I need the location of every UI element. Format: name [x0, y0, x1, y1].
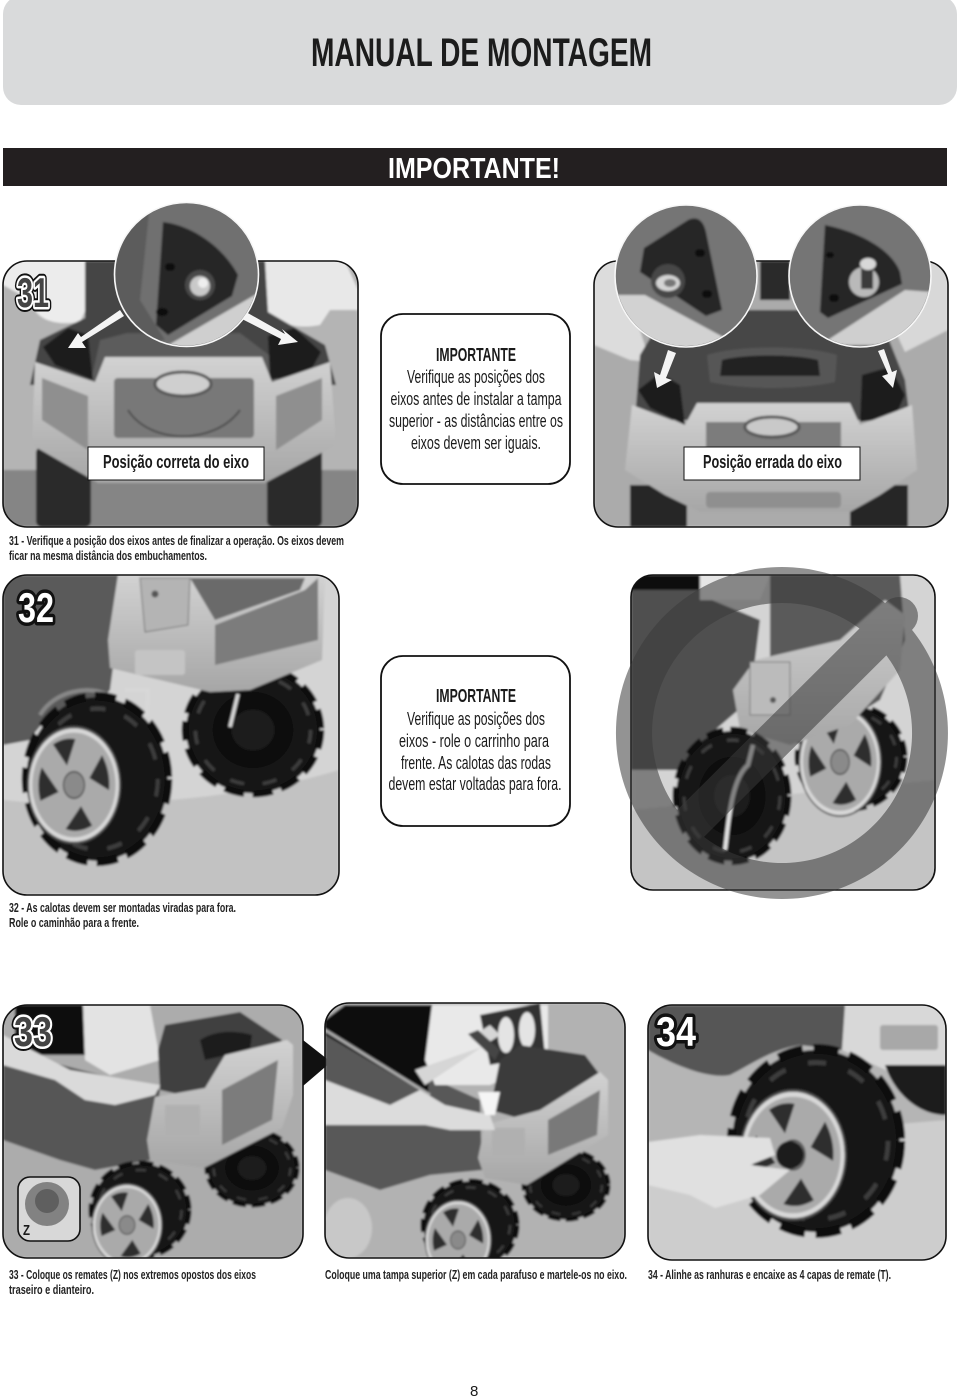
callout: step 31 importante: superior - as distâncias entre os: [389, 411, 563, 431]
label: wrong position: [684, 447, 860, 480]
badge: step 31: 31: [17, 269, 49, 316]
caption: step 32: 32 - As calotas devem ser montadas viradas para fora.: [9, 900, 236, 915]
caption: step 33: traseiro e dianteiro.: [9, 1282, 94, 1297]
callout: step 32 importante: Verifique as posições dos: [407, 709, 545, 729]
caption: step 32: Role o caminhão para a frente.: [9, 915, 139, 930]
magnifier: wrong axle right: [789, 205, 932, 348]
panel: step 32 correct wheels photo: [3, 575, 339, 895]
label: correct position: Posição correta do eixo: [103, 452, 249, 472]
callout: step 32 importante: devem estar voltadas para fora.: [388, 774, 562, 794]
badge: step 33: 33: [14, 1008, 52, 1055]
caption: step 32: [9, 900, 236, 930]
caption: step 33 hammer: Coloque uma tampa superior (Z) em cada parafuso e martele-os no eixo.: [325, 1267, 627, 1282]
panel: step 33 photo one: [3, 1005, 303, 1266]
caption: step 33: 33 - Coloque os remates (Z) nos extremos opostos dos eixos: [9, 1267, 256, 1282]
callout: step 32 importante: [381, 656, 570, 826]
header band: [3, 0, 957, 105]
badge: step 32: 32: [18, 584, 54, 631]
caption: step 33: [9, 1267, 256, 1297]
callout: step 31 importante: IMPORTANTE: [436, 345, 516, 365]
badge: step 33: 33: [14, 1008, 52, 1055]
panel: step 33 photo two: [324, 1003, 625, 1280]
magnifier: wrong axle left: [615, 205, 758, 350]
badge: step 34: 34: [656, 1008, 697, 1055]
callout: step 31 importante: [381, 314, 570, 484]
callout: step 31 importante: eixos antes de instalar a tampa: [390, 389, 562, 409]
panel: step 31 wrong position photo: [594, 261, 948, 527]
inset: part Z: [18, 1177, 80, 1241]
arrow between steps: [303, 1040, 331, 1086]
caption: step 31: [9, 533, 344, 563]
important banner: IMPORTANTE!: [388, 153, 560, 185]
callout: step 32 importante: frente. As calotas das rodas: [401, 753, 551, 773]
inset: part Z: Z: [23, 1222, 30, 1239]
prohibition symbol: [616, 567, 948, 899]
magnifier: correct axle: [114, 202, 260, 347]
badge: step 31: 31: [17, 269, 49, 316]
title: MANUAL DE MONTAGEM: [311, 31, 652, 75]
callout: step 32 importante: eixos - role o carrinho para: [399, 731, 550, 751]
callout: step 32 importante: IMPORTANTE: [436, 686, 516, 706]
important banner: [3, 148, 947, 186]
caption: step 31: 31 - Verifique a posição dos eixos antes de finalizar a operação. Os eixos devem: [9, 533, 344, 548]
arrows: correct position: [68, 310, 298, 348]
caption: step 31: ficar na mesma distância dos embuchamentos.: [9, 548, 207, 563]
panel: step 34 photo: [648, 1005, 946, 1260]
label: wrong position: Posição errada do eixo: [703, 452, 842, 472]
callout: step 31 importante: Verifique as posições dos: [407, 367, 545, 387]
badge: step 31: [17, 269, 49, 316]
arrows: wrong position: [654, 349, 897, 388]
panel: step 31 correct position photo: [3, 261, 358, 527]
callout: step 31 importante: eixos devem ser iguais.: [411, 433, 541, 453]
label: correct position: [88, 447, 264, 480]
panel: step 32 wrong wheels photo: [631, 575, 935, 890]
